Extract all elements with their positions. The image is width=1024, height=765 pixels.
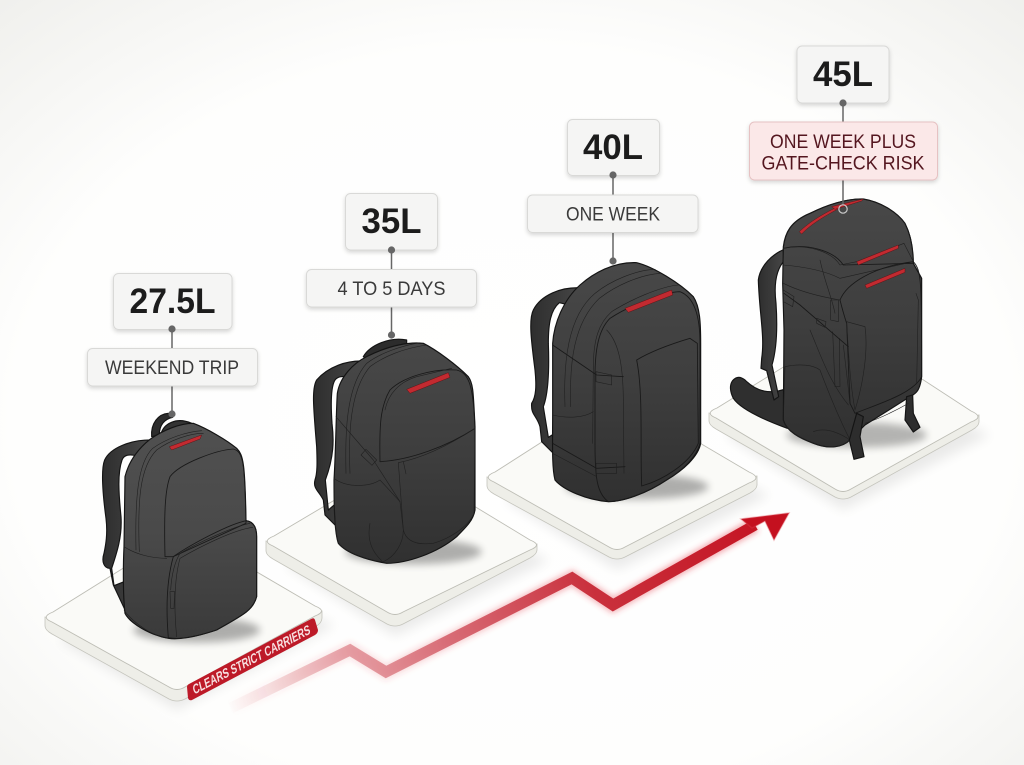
- use case: one week: [528, 195, 698, 232]
- panel: platform 2: [266, 464, 550, 636]
- use case: one week plus gate-check risk: [750, 122, 938, 180]
- front pocket: [167, 521, 257, 638]
- capacity: 35L: [346, 194, 438, 254]
- use case: weekend trip: WEEKEND TRIP: [105, 358, 239, 379]
- use case: one week plus gate-check risk: ONE WEEK PLUS: [770, 132, 916, 153]
- side panels: [783, 330, 850, 447]
- main body: [783, 199, 922, 447]
- panel: platform 4: [709, 332, 990, 510]
- front shell: [595, 292, 700, 502]
- capacity: 40L: [568, 120, 660, 179]
- callout: clears strict carriers tag: CLEARS STRICT CARRIERS: [191, 621, 312, 698]
- shoulder strap: [314, 361, 370, 530]
- callout: clears strict carriers tag: [187, 618, 318, 700]
- backpack: 27.5L daypack: [102, 413, 260, 643]
- side compression strap: [783, 290, 848, 347]
- capacity: 35L: 35L: [362, 202, 422, 241]
- front pocket: [637, 338, 698, 486]
- capacity: 27.5L: [114, 274, 232, 333]
- use case: 4 to 5 days: [306, 270, 476, 307]
- panel: platform 3: [487, 397, 770, 570]
- lower panel: [398, 428, 475, 544]
- icon: top handles: [152, 413, 192, 437]
- label stack: 40L: [528, 120, 698, 265]
- red zip pull: [407, 373, 450, 393]
- top handle: [363, 339, 407, 362]
- red zip pulls: [799, 199, 905, 288]
- main body: [123, 423, 257, 639]
- use case: one week plus gate-check risk: GATE-CHECK RISK: [762, 154, 925, 174]
- front pocket: [840, 262, 922, 413]
- capacity: 45L: 45L: [813, 55, 873, 94]
- backpack: 40L travel pack: [531, 263, 708, 502]
- shoulder strap: [531, 288, 587, 460]
- upper shell panel: [380, 370, 475, 462]
- panel: platform 1: [45, 532, 335, 710]
- lower straps: [849, 395, 920, 459]
- compression straps: [553, 345, 625, 477]
- hip belt: [730, 377, 787, 428]
- main body: [553, 263, 701, 502]
- use case: weekend trip: [88, 348, 258, 386]
- backpack: 45L hiking pack: [730, 199, 927, 459]
- capacity: 45L: [797, 46, 889, 107]
- front upper panel: [165, 449, 246, 557]
- capacity: 40L: 40L: [583, 128, 643, 167]
- use case: one week: ONE WEEK: [566, 204, 660, 226]
- shoulder strap: [758, 248, 787, 400]
- main body: [334, 343, 475, 563]
- label stack: 27.5L: [88, 274, 258, 418]
- arrow: rising capacity trend: [231, 513, 789, 708]
- top lid: [783, 199, 913, 265]
- red zip pull: [625, 290, 673, 312]
- shoulder strap: [102, 440, 153, 613]
- label stack: 35L: [306, 194, 476, 339]
- icon: red zip pull: [169, 435, 202, 450]
- capacity: 27.5L: 27.5L: [130, 282, 216, 321]
- backpack: 35L daypack: [314, 339, 482, 564]
- label stack: 45L: [750, 46, 938, 213]
- use case: 4 to 5 days: 4 TO 5 DAYS: [338, 279, 446, 300]
